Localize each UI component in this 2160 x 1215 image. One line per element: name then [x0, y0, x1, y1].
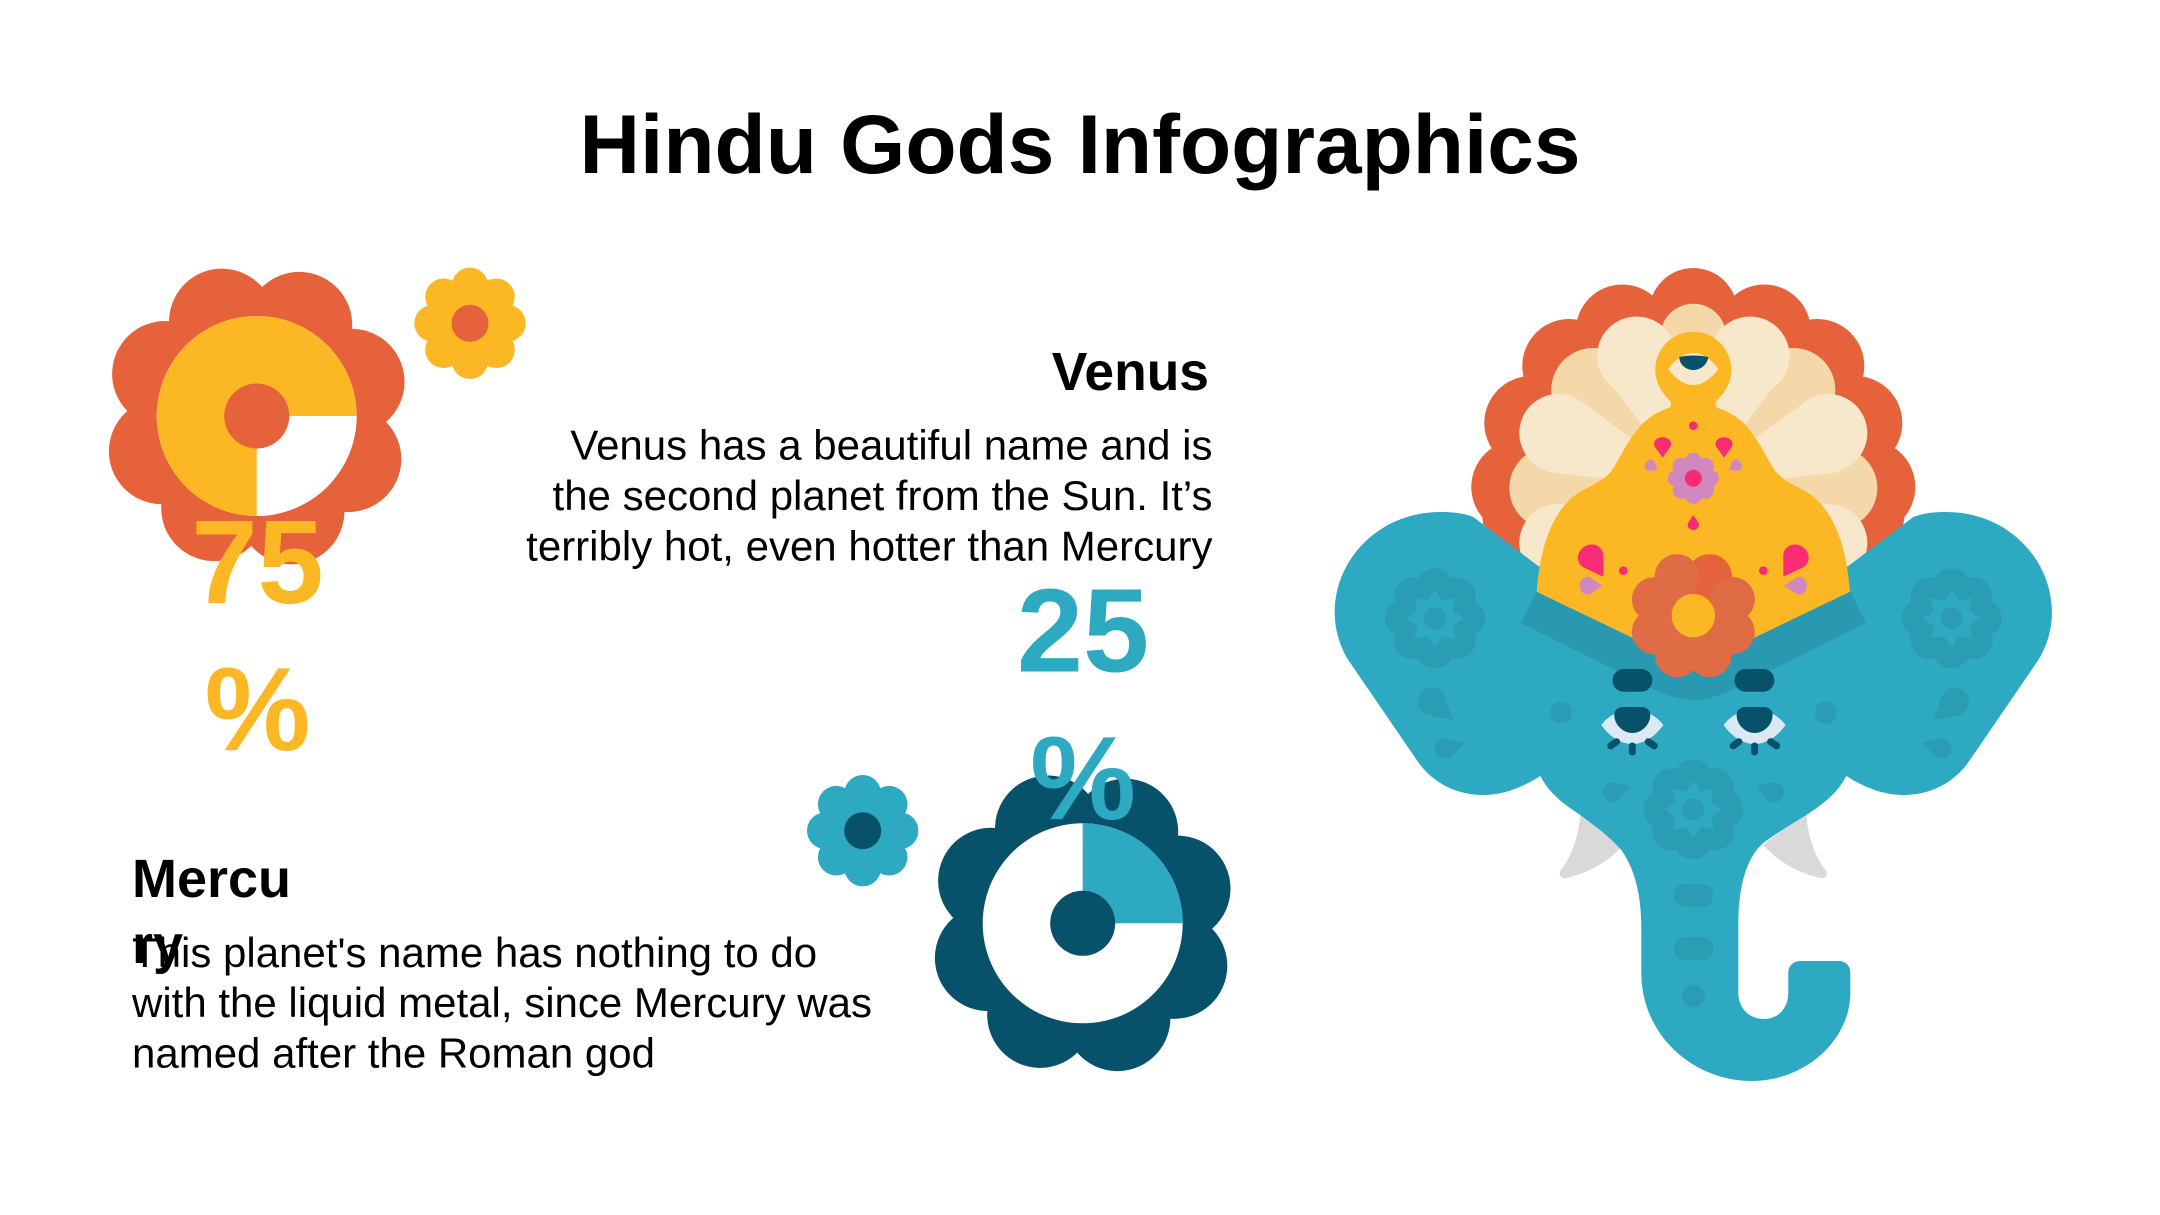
stat: 25%: 25 [1017, 564, 1149, 698]
headband shadow [1521, 592, 1866, 700]
heading: Mercury: Mercu [132, 849, 291, 909]
stat: 75%: % [205, 643, 310, 776]
icon: small yellow flower [414, 268, 526, 379]
chart: Venus flower donut 75% [104, 264, 409, 569]
illustration: Ganesha elephant head [1335, 268, 2052, 1081]
crest: cream petals [1509, 304, 1877, 582]
text block: Venus description: Venus has a beautiful name and is [570, 422, 1212, 468]
text block: Mercury description: with the liquid metal, since Mercury was [131, 979, 872, 1026]
tusks [1560, 810, 1827, 878]
crown ornaments [1573, 421, 1813, 595]
text block: Mercury description: This planet's name has nothing to do [132, 929, 817, 976]
text block: Mercury description: named after the Roman god [132, 1030, 655, 1076]
icon: small teal flower [807, 775, 918, 886]
title: Hindu Gods Infographics [580, 97, 1580, 191]
peacock crest: orange scallops [1471, 268, 1915, 638]
stat: 75%: 75 [191, 496, 324, 629]
text block: Venus description: the second planet from the Sun. It’s [553, 472, 1212, 519]
yellow crown [1537, 332, 1850, 667]
eyes [1601, 707, 1786, 752]
third eye [1668, 353, 1718, 385]
crown flower [1632, 554, 1755, 677]
eyebrows [1613, 669, 1774, 692]
ear and cheek ornaments [1385, 568, 2002, 1008]
heading: Venus: Venus [1052, 343, 1209, 402]
heading: Mercury: ry [132, 915, 183, 975]
text block: Venus description: terribly hot, even hotter than Mercury [526, 522, 1212, 570]
chart: Mercury flower donut 25% [930, 771, 1235, 1076]
stat: 25%: % [1030, 712, 1136, 845]
elephant head, ears and trunk [1335, 512, 2052, 1081]
